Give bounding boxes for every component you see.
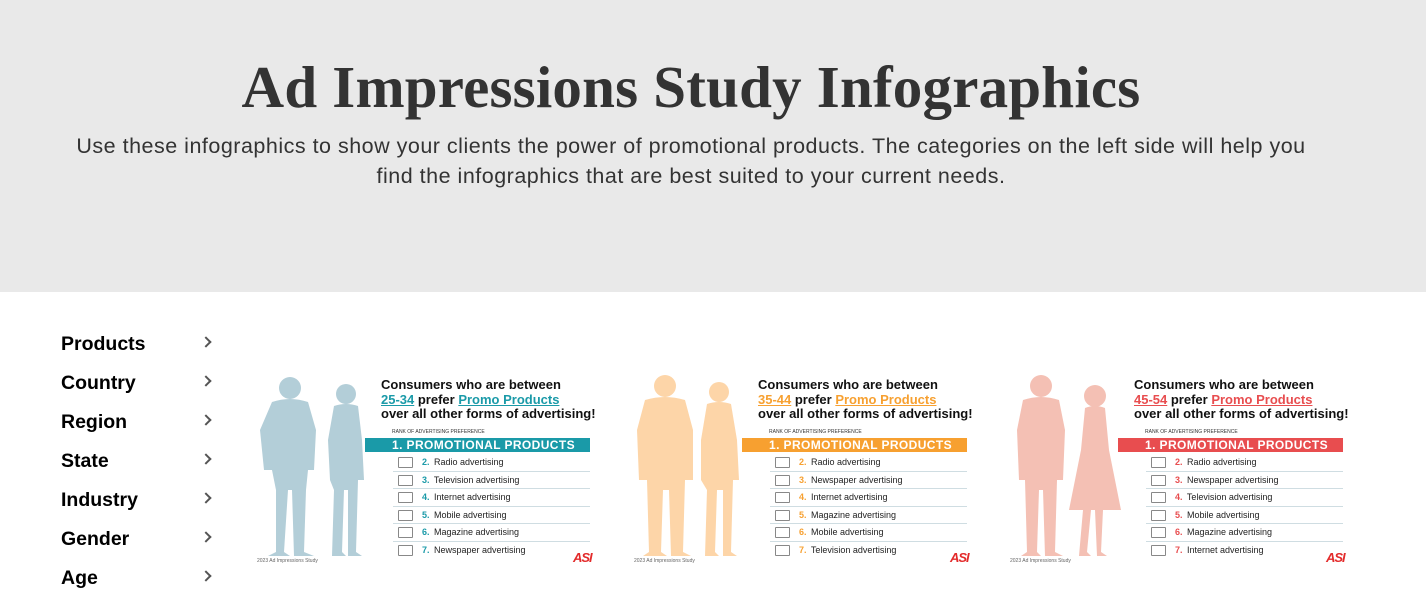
ranking list: 7. Newspaper advertising	[422, 544, 526, 554]
ranking list: 7. Internet advertising	[1175, 544, 1264, 554]
card: 25-34: 2023 Ad Impressions Study	[257, 558, 318, 564]
sidebar navigation: Products	[61, 333, 146, 355]
card: 45-54	[1010, 375, 1349, 565]
ranking list	[770, 457, 967, 556]
ranking list: 3. Newspaper advertising	[1175, 474, 1279, 484]
sidebar navigation	[61, 333, 212, 589]
heading: 35-44 prefer Promo Products	[758, 392, 936, 406]
rank bar: 1. PROMOTIONAL PRODUCTS	[392, 438, 575, 452]
card: 35-44: RANK OF ADVERTISING PREFERENCE	[769, 429, 862, 435]
subtitle: Use these infographics to show your clients the power of promotional products. The categories on the left side will help you find the infographics that are best suited to your current needs.	[76, 134, 1306, 188]
ranking list: 2. Radio advertising	[799, 457, 881, 467]
ranking list: 7. Television advertising	[799, 544, 896, 554]
heading: Consumers who are between	[381, 377, 561, 392]
ranking list	[1146, 457, 1343, 556]
sidebar navigation: Gender	[61, 528, 129, 550]
card: 45-54: 2023 Ad Impressions Study	[1010, 558, 1071, 564]
title: Ad Impressions Study Infographics	[242, 54, 1140, 120]
ranking list: 4. Internet advertising	[799, 492, 888, 502]
ranking list: 4. Television advertising	[1175, 492, 1272, 502]
sidebar navigation: Country	[61, 372, 136, 394]
silhouettes	[1017, 375, 1121, 556]
ranking list	[393, 457, 590, 556]
heading	[1134, 377, 1349, 421]
ranking list: 5. Mobile advertising	[422, 510, 507, 520]
ranking list: 5. Mobile advertising	[1175, 510, 1260, 520]
heading: Consumers who are between	[758, 377, 938, 392]
heading: over all other forms of advertising!	[1134, 406, 1349, 421]
ranking list: 4. Internet advertising	[422, 492, 511, 502]
heading: over all other forms of advertising!	[381, 406, 596, 421]
logo: ASI	[1326, 550, 1345, 565]
card: 25-34: RANK OF ADVERTISING PREFERENCE	[392, 429, 485, 435]
silhouettes	[637, 375, 739, 556]
heading: Consumers who are between	[1134, 377, 1314, 392]
logo: ASI	[950, 550, 969, 565]
ranking list: 2. Radio advertising	[1175, 457, 1257, 467]
heading: over all other forms of advertising!	[758, 406, 973, 421]
sidebar navigation: State	[61, 450, 109, 472]
sidebar navigation: Region	[61, 411, 127, 433]
silhouettes	[260, 377, 364, 556]
card: 45-54: RANK OF ADVERTISING PREFERENCE	[1145, 429, 1238, 435]
card: 35-44	[634, 375, 973, 565]
heading: 25-34 prefer Promo Products	[381, 392, 559, 406]
rank bar: 1. PROMOTIONAL PRODUCTS	[769, 438, 952, 452]
ranking list: 2. Radio advertising	[422, 457, 504, 467]
ranking list: 3. Television advertising	[422, 474, 519, 484]
heading: 45-54 prefer Promo Products	[1134, 392, 1312, 406]
heading	[758, 377, 973, 421]
ranking list: 3. Newspaper advertising	[799, 474, 903, 484]
rank bar: 1. PROMOTIONAL PRODUCTS	[1145, 438, 1328, 452]
ranking list: 6. Magazine advertising	[422, 527, 519, 537]
ranking list: 6. Mobile advertising	[799, 527, 884, 537]
logo: ASI	[573, 550, 592, 565]
sidebar navigation: Industry	[61, 489, 138, 511]
card: 35-44: 2023 Ad Impressions Study	[634, 558, 695, 564]
sidebar navigation: Age	[61, 567, 98, 589]
header band	[0, 0, 1426, 292]
ranking list: 5. Magazine advertising	[799, 510, 896, 520]
heading	[381, 377, 596, 421]
ranking list: 6. Magazine advertising	[1175, 527, 1272, 537]
card: 25-34	[257, 377, 596, 565]
